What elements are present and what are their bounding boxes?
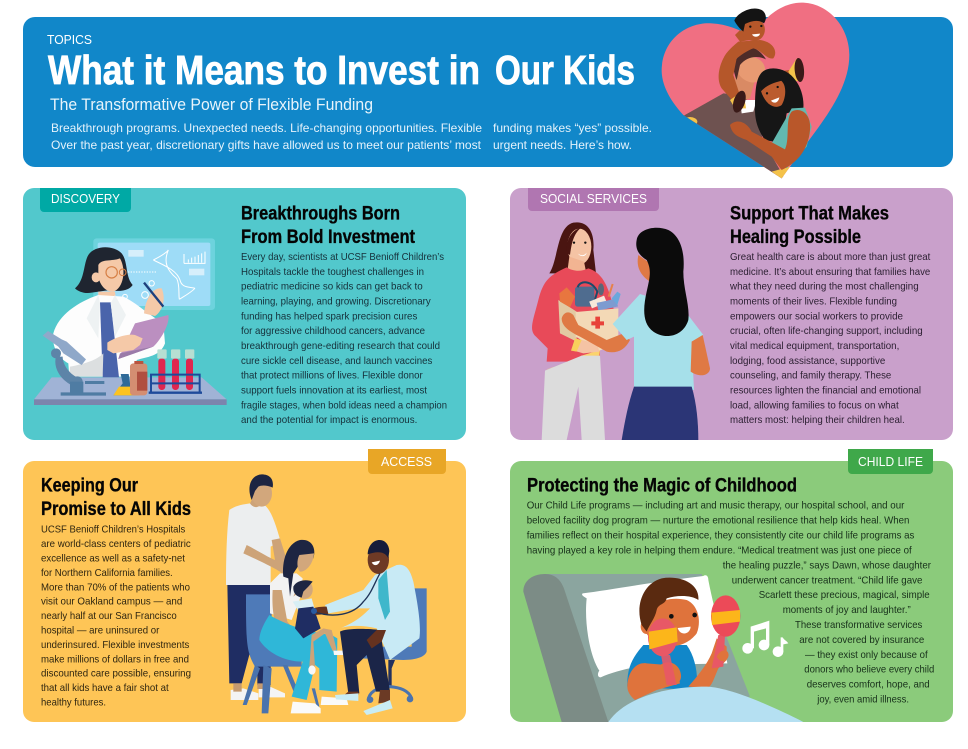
banner panel bbox=[23, 3, 953, 182]
body text: discovery: Every day, scientists at UCSF Benioff Children’s bbox=[241, 251, 444, 263]
illustration: child in bed with maracas bbox=[523, 574, 803, 722]
tag: discovery bbox=[40, 188, 131, 212]
body text: child life: beloved facility dog program — nurture the emotional resilience that help kids heal. When bbox=[527, 515, 910, 527]
body text: access: excellence as well as a safety-net bbox=[41, 552, 185, 564]
heading: protecting magic: Protecting the Magic of Childhood bbox=[527, 475, 797, 497]
body text: discovery: for aggressive childhood cancers, advance bbox=[241, 325, 425, 337]
body text: discovery: pediatric medicine so kids can get back to bbox=[241, 281, 423, 293]
heading: keeping our promise bbox=[41, 475, 191, 520]
body text: access: healthy futures. bbox=[41, 696, 106, 708]
illustration: scientist in lab bbox=[34, 238, 227, 405]
body text: child life: having played a key role in helping them endure. “Medical treatment was just one piece of bbox=[527, 544, 912, 556]
body text: discovery: and the potential for impact is enormous. bbox=[241, 414, 417, 426]
body text: access: are world-class centers of pediatric bbox=[41, 538, 191, 550]
body text: social services: empowers our social workers to provide bbox=[730, 310, 903, 322]
panel: child life bbox=[510, 449, 953, 722]
body text: access: nearly half at our San Francisco bbox=[41, 610, 177, 622]
body text: access: make millions of dollars in free and bbox=[41, 653, 189, 665]
heading: keeping our promise: Keeping Our bbox=[41, 475, 138, 497]
body text: child life: donors who believe every child bbox=[804, 664, 934, 676]
body text: social services: vital medical equipment, transportation, bbox=[730, 340, 899, 352]
heading: support bbox=[730, 202, 889, 248]
heading: keeping our promise: Promise to All Kids bbox=[41, 498, 191, 520]
body text: child life bbox=[527, 500, 934, 706]
icon: music notes bbox=[742, 621, 788, 657]
tag: access: ACCESS bbox=[381, 455, 432, 469]
body text: social services: medicine. It’s about ensuring that families have bbox=[730, 266, 930, 278]
title: Our Kids bbox=[495, 47, 635, 93]
body text: child life: — they exist only because of bbox=[805, 649, 928, 661]
body text: child life: the healing puzzle,” says Dawn, whose daughter bbox=[723, 559, 931, 571]
body text: child life: underwent cancer treatment. “Child life gave bbox=[732, 574, 923, 586]
tag: social services: SOCIAL SERVICES bbox=[540, 192, 647, 206]
body text: discovery: funding has helped spark precision cures bbox=[241, 310, 417, 322]
body text: social services: crucial, often life-changing support, including bbox=[730, 325, 923, 337]
heading: breakthroughs: From Bold Investment bbox=[241, 226, 415, 248]
body text: social services bbox=[729, 251, 930, 426]
body text: discovery: fragile stages, when bold ideas need a champion bbox=[241, 399, 447, 411]
heading: breakthroughs bbox=[241, 202, 415, 248]
body text: child life: joy, even amid illness. bbox=[816, 694, 909, 706]
banner intro text: urgent needs. Here’s how. bbox=[493, 138, 632, 152]
body text: child life: These transformative services bbox=[795, 619, 922, 631]
panel: discovery bbox=[23, 188, 466, 440]
body text: access bbox=[41, 524, 191, 708]
subtitle: The Transformative Power of Flexible Funding bbox=[50, 96, 373, 114]
body text: discovery: breakthrough gene-editing research that could bbox=[241, 340, 440, 352]
banner intro text: Breakthrough programs. Unexpected needs. Life-changing opportunities. Flexible bbox=[51, 121, 482, 135]
body text: social services: lodging, food assistance, supportive bbox=[730, 355, 885, 367]
tag: child life bbox=[848, 449, 933, 474]
panel: social services bbox=[510, 188, 953, 440]
heading: support: Support That Makes bbox=[730, 202, 889, 224]
body text: social services: what they need during the most challenging bbox=[729, 281, 919, 293]
body text: discovery: learning, playing, and growing. Discretionary bbox=[241, 296, 431, 308]
body text: discovery: that protect millions of lives. Flexible donor bbox=[241, 370, 423, 382]
body text: child life: families reflect on their hospital experience, they consistently cite our child life programs as bbox=[527, 530, 914, 542]
body text: child life: Scarlett these precious, magical, simple bbox=[759, 589, 930, 601]
body text: social services: counseling, and family therapy. These bbox=[730, 370, 891, 382]
body text: discovery: support fuels innovation at its earliest, most bbox=[241, 384, 427, 396]
body text: social services: matters most: helping their children heal. bbox=[730, 414, 905, 426]
banner intro text: Over the past year, discretionary gifts have allowed us to meet our patients’ most bbox=[51, 138, 482, 152]
body text: child life: are not covered by insurance bbox=[799, 634, 924, 646]
title: What it Means to Invest in bbox=[48, 47, 480, 93]
tag: access bbox=[368, 449, 446, 474]
tag: discovery: DISCOVERY bbox=[51, 192, 121, 206]
body text: discovery: Hospitals tackle the toughest challenges in bbox=[241, 266, 424, 278]
tag: social services bbox=[528, 188, 659, 211]
panel: access bbox=[23, 449, 466, 722]
tag: child life: CHILD LIFE bbox=[858, 455, 923, 469]
body text: social services: load, allowing families to focus on what bbox=[730, 399, 899, 411]
body text: child life: deserves comfort, hope, and bbox=[807, 679, 930, 691]
illustration: family in heart bbox=[662, 3, 849, 182]
heading: support: Healing Possible bbox=[730, 226, 861, 248]
body text: child life: moments of joy and laughter.” bbox=[783, 604, 911, 616]
body text: discovery bbox=[241, 251, 447, 426]
body text: social services: moments of their lives. Flexible funding bbox=[730, 296, 897, 308]
body text: access: that all kids have a fair shot at bbox=[41, 682, 169, 694]
body text: child life: Our Child Life programs — including art and music therapy, our hospital school, and our bbox=[527, 500, 905, 512]
label: topics: TOPICS bbox=[47, 32, 92, 47]
banner intro text bbox=[51, 121, 652, 152]
body text: access: hospital — are uninsured or bbox=[41, 624, 160, 636]
body text: access: underinsured. Flexible investments bbox=[41, 639, 189, 651]
heading: breakthroughs: Breakthroughs Born bbox=[241, 202, 400, 224]
banner intro text: funding makes “yes” possible. bbox=[493, 121, 652, 135]
body text: social services: Great health care is about more than just great bbox=[730, 251, 930, 263]
body text: discovery: cure sickle cell disease, and launch vaccines bbox=[241, 355, 432, 367]
illustration: social worker with care box bbox=[532, 222, 710, 440]
illustration: family with doctor bbox=[226, 474, 427, 715]
body text: access: for Northern California families. bbox=[41, 567, 173, 579]
body text: social services: resources lighten the financial and emotional bbox=[730, 384, 921, 396]
body text: access: UCSF Benioff Children’s Hospitals bbox=[41, 524, 185, 536]
body text: access: discounted care possible, ensuring bbox=[41, 668, 191, 680]
body text: access: visit our Oakland campus — and bbox=[41, 596, 182, 608]
body text: access: More than 70% of the patients who bbox=[41, 581, 190, 593]
